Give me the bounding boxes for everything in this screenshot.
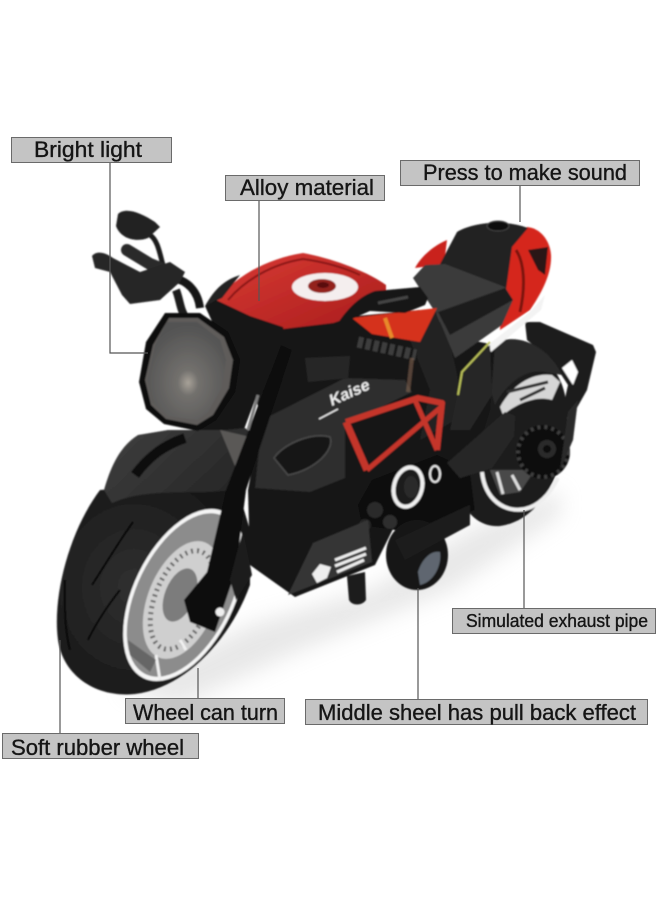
label: Simulated exhaust pipe: Simulated exhaust pipe xyxy=(466,611,648,631)
mirror xyxy=(116,211,160,240)
label: Middle sheel has pull back effect: Middle sheel has pull back effect xyxy=(318,700,636,725)
label: Bright light xyxy=(12,137,172,162)
leader: wheel can turn xyxy=(197,668,199,698)
side vent xyxy=(274,436,331,475)
swingarm xyxy=(447,412,515,478)
rear wheel xyxy=(458,322,596,526)
leader: soft rubber wheel xyxy=(59,640,61,733)
leader: middle wheel xyxy=(417,588,419,699)
tank shoulder xyxy=(195,300,290,440)
lever xyxy=(92,253,185,304)
small ring xyxy=(430,466,440,482)
red trellis frame xyxy=(346,398,442,470)
lower panel with logo xyxy=(288,520,372,595)
front fender xyxy=(104,428,262,503)
brand lettering xyxy=(319,377,373,419)
yellow pinstripe xyxy=(458,342,490,395)
headlight xyxy=(139,313,240,431)
label: Alloy material: Alloy material xyxy=(240,175,374,200)
leader: bright light xyxy=(110,163,148,353)
red tail xyxy=(500,227,551,330)
bar xyxy=(172,278,200,308)
red area under tank xyxy=(352,308,437,342)
sprocket xyxy=(516,425,570,479)
engine white ring xyxy=(389,464,427,510)
front fork xyxy=(184,345,292,632)
engine xyxy=(358,412,515,531)
label: Bright light: Bright light xyxy=(34,137,142,162)
seat hump xyxy=(440,223,528,290)
callout lines xyxy=(60,163,524,733)
grip xyxy=(127,250,160,268)
lens xyxy=(147,322,226,420)
motorcycle xyxy=(57,211,596,701)
side fairing xyxy=(255,378,412,492)
label: Wheel can turn: Wheel can turn xyxy=(133,700,278,725)
brand lettering: Kaise xyxy=(327,377,373,410)
label: Soft rubber wheel: Soft rubber wheel xyxy=(11,735,184,760)
middle pull-back wheel xyxy=(386,505,470,590)
leader: simulated exhaust pipe xyxy=(523,510,525,608)
right hand mirror stalk xyxy=(338,287,428,323)
leader: alloy material xyxy=(258,200,260,301)
left handlebar cluster xyxy=(92,211,200,318)
rim xyxy=(97,489,271,701)
tyre xyxy=(57,480,250,694)
label: Press to make sound: Press to make sound xyxy=(423,160,627,185)
leader: press to make sound xyxy=(519,186,521,222)
white undertail strip xyxy=(488,295,545,352)
fuel tank: alloy xyxy=(216,253,386,329)
front wheel xyxy=(57,480,271,701)
kickstand posts xyxy=(347,572,366,604)
seat hole xyxy=(487,221,509,231)
tank cap xyxy=(292,273,358,301)
grey seat pad xyxy=(413,264,513,358)
ground shadow xyxy=(120,490,560,705)
mirror stalk xyxy=(150,235,163,265)
red left of seat xyxy=(415,240,447,268)
rear seat xyxy=(410,221,551,440)
rear fender arm xyxy=(525,322,596,420)
main dark body xyxy=(225,310,495,597)
handlebar and right grip xyxy=(265,328,418,392)
